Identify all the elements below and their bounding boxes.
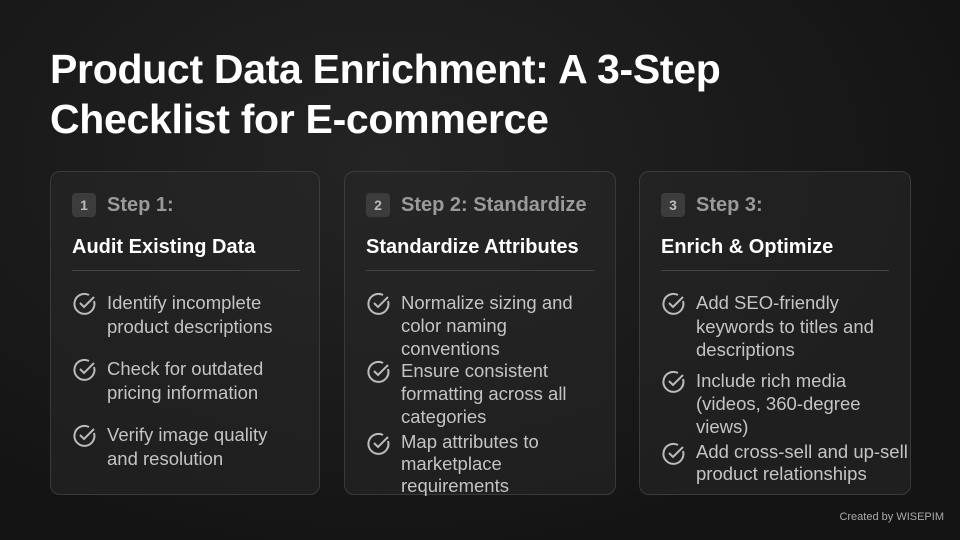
- badge 3: 3: [669, 197, 677, 213]
- subtitle: Enrich & Optimize: [661, 236, 833, 258]
- subtitle: Standardize Attributes: [366, 236, 579, 258]
- item: Add SEO-friendly keywords to titles and descriptions: [696, 292, 874, 360]
- step label: Step 1:: [107, 194, 174, 216]
- credit: Created by WISEPIM: [839, 511, 944, 523]
- item: Map attributes to marketplace requirements: [401, 431, 539, 496]
- item: Add cross-sell and up-sell product relationships: [696, 441, 908, 484]
- badge 2: [366, 193, 390, 217]
- item: Normalize sizing and color naming conventions: [401, 292, 573, 359]
- panel: step 1: [50, 171, 320, 495]
- subtitle: Audit Existing Data: [72, 236, 255, 258]
- item: Verify image quality and resolution: [107, 424, 267, 468]
- badge 1: 1: [80, 197, 88, 213]
- item: Check for outdated pricing information: [107, 358, 263, 402]
- step label: Step 3:: [696, 194, 763, 216]
- title: Checklist for E-commerce: [50, 96, 549, 142]
- badge 3: [661, 193, 685, 217]
- panel: step 2: [344, 171, 616, 495]
- badge 2: 2: [374, 197, 382, 213]
- badge 1: [72, 193, 96, 217]
- panel: step 3: [639, 171, 911, 495]
- title: Product Data Enrichment: A 3-Step: [50, 46, 720, 92]
- item: Ensure consistent formatting across all categories: [401, 360, 567, 427]
- item: Identify incomplete product descriptions: [107, 292, 273, 336]
- step label: Step 2: Standardize: [401, 194, 587, 216]
- title: [50, 46, 720, 142]
- item: Include rich media (videos, 360-degree views): [696, 370, 861, 437]
